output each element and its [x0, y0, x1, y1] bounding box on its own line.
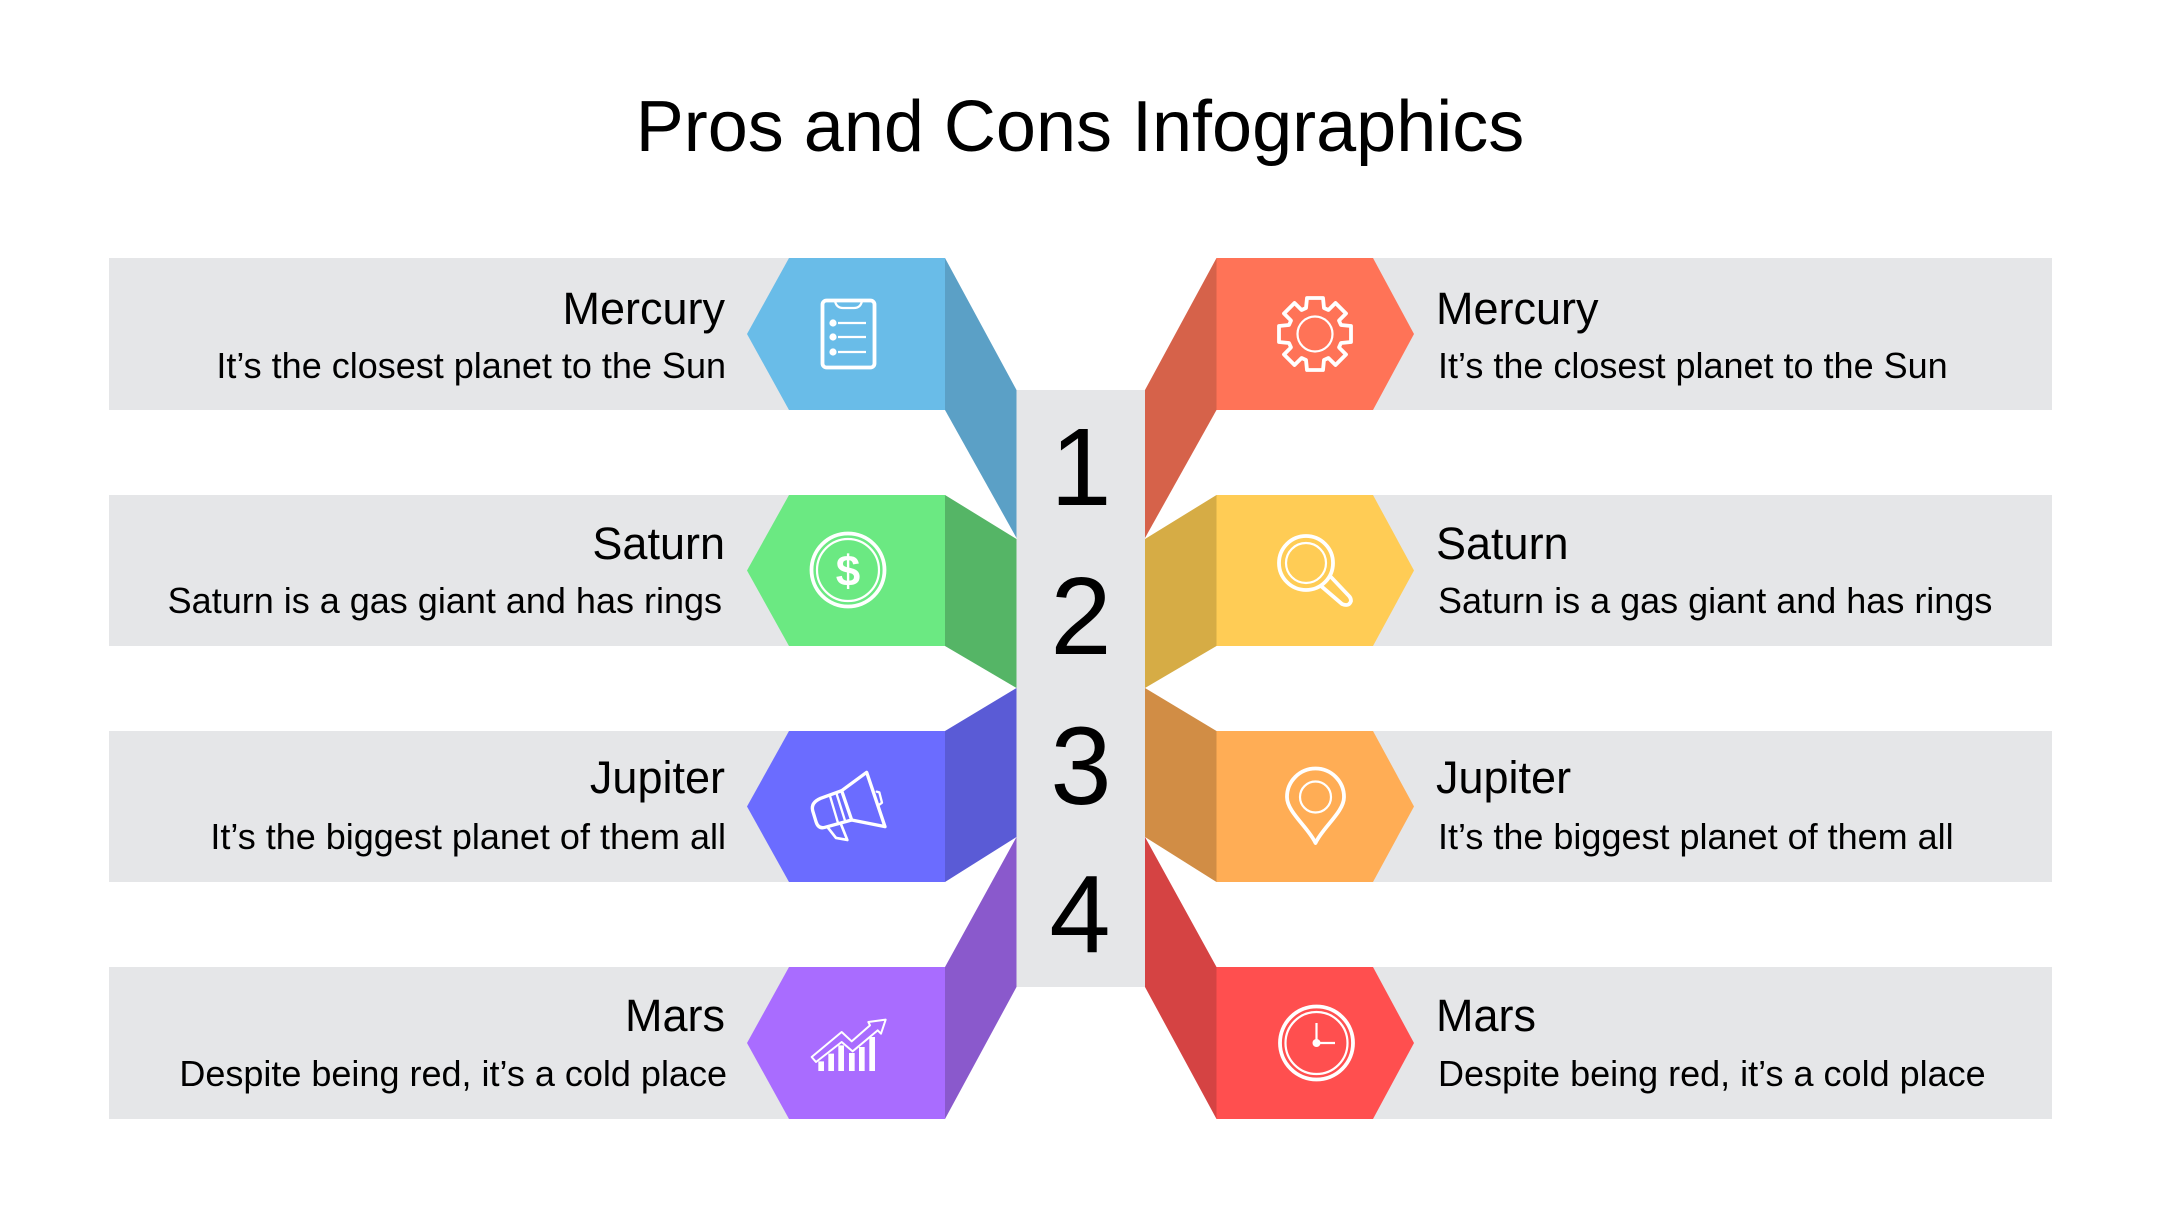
band	[109, 967, 809, 1119]
fold	[1145, 837, 1216, 1119]
hexagon	[747, 731, 945, 882]
heading: Mars	[1436, 990, 1536, 1041]
description: Despite being red, it’s a cold place	[179, 1053, 727, 1094]
panel: right row 3 Jupiter	[1145, 688, 2052, 882]
band	[1352, 258, 2052, 410]
icon: megaphone	[812, 772, 885, 840]
heading: Jupiter	[590, 752, 725, 803]
heading: Saturn	[592, 518, 725, 569]
band	[1352, 495, 2052, 646]
fold	[945, 495, 1016, 688]
fold	[945, 258, 1016, 538]
panel: left row 1 Mercury	[109, 258, 1016, 538]
description: Despite being red, it’s a cold place	[1438, 1053, 1986, 1094]
panel: right row 1 Mercury	[1145, 258, 2052, 538]
title: Pros and Cons Infographics	[636, 87, 1524, 167]
icon: dollar coin	[812, 534, 884, 606]
hexagon	[1216, 495, 1414, 646]
panel: left row 4 Mars	[109, 837, 1016, 1119]
fold	[1145, 258, 1216, 538]
band	[1352, 967, 2052, 1119]
description: It’s the biggest planet of them all	[1438, 816, 1954, 857]
description: Saturn is a gas giant and has rings	[168, 580, 722, 621]
heading: Mars	[625, 990, 725, 1041]
number box 3: 3	[1050, 705, 1112, 828]
hexagon	[1216, 731, 1414, 882]
description: Saturn is a gas giant and has rings	[1438, 580, 1992, 621]
fold	[945, 837, 1016, 1119]
band	[109, 731, 809, 882]
description: It’s the closest planet to the Sun	[1438, 345, 1948, 386]
hexagon	[747, 495, 945, 646]
panel: left row 2 Saturn	[109, 495, 1016, 688]
icon: magnifier	[1279, 536, 1351, 605]
icon: clock	[1280, 1006, 1353, 1080]
band	[109, 495, 809, 646]
hexagon	[1216, 258, 1414, 410]
heading: Mercury	[1436, 283, 1599, 334]
hexagon	[747, 258, 945, 410]
number box 1: 1	[1050, 406, 1112, 529]
band	[109, 258, 809, 410]
number box 4: 4	[1049, 853, 1111, 976]
fold	[1145, 688, 1216, 882]
fold	[945, 688, 1016, 882]
heading: Saturn	[1436, 518, 1569, 569]
hexagon	[747, 967, 945, 1119]
number box 1	[1016, 390, 1145, 539]
panel: left row 3 Jupiter	[109, 688, 1016, 882]
icon: clipboard	[822, 300, 874, 368]
fold	[1145, 495, 1216, 688]
hexagon	[1216, 967, 1414, 1119]
heading: Jupiter	[1436, 752, 1571, 803]
number box 2	[1016, 539, 1145, 688]
number box 3	[1016, 688, 1145, 837]
icon: map pin	[1287, 768, 1344, 843]
heading: Mercury	[562, 283, 725, 334]
number box 4	[1016, 837, 1145, 987]
panel: right row 2 Saturn	[1145, 495, 2052, 688]
icon: growth chart	[812, 1020, 886, 1071]
panel: right row 4 Mars	[1145, 837, 2052, 1119]
center column: numbers	[1016, 390, 1145, 987]
description: It’s the biggest planet of them all	[210, 816, 726, 857]
description: It’s the closest planet to the Sun	[216, 345, 726, 386]
band	[1352, 731, 2052, 882]
icon: dollar coin: $	[836, 547, 860, 596]
icon: gear	[1279, 298, 1351, 370]
number box 2: 2	[1050, 555, 1112, 678]
